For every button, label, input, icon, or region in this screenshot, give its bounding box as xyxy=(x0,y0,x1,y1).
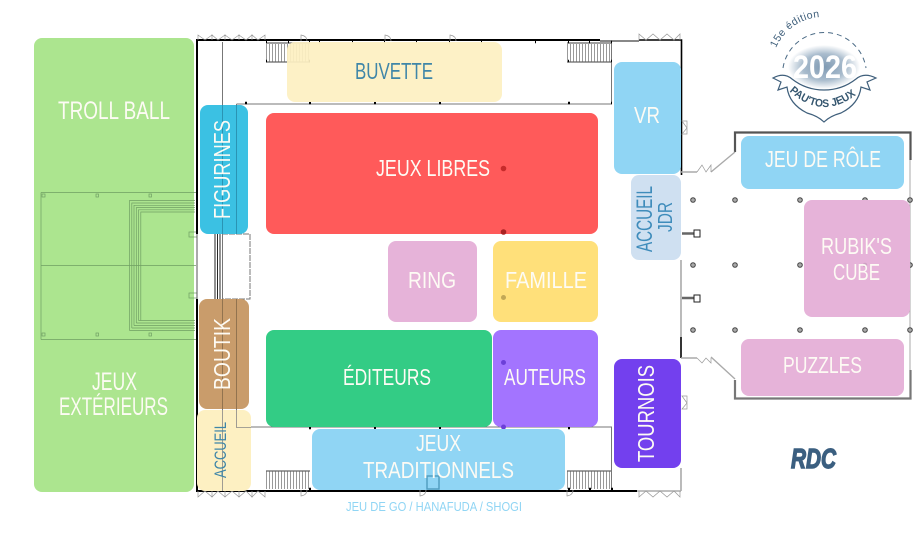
logo edition: 15e édition xyxy=(770,12,819,48)
logo name: PAU'TOS JEUX xyxy=(790,86,856,108)
logo ribbon xyxy=(773,75,876,122)
zone: buvette: BUVETTE xyxy=(355,58,433,84)
logo dashed ring xyxy=(783,32,866,68)
zone: accueil jdr: ACCUEIL xyxy=(632,186,657,252)
annex columns xyxy=(691,198,912,332)
label: rdc level: RDC xyxy=(791,443,837,474)
zone: figurines: FIGURINES xyxy=(209,120,235,219)
zone: jeux traditionnels: JEUX xyxy=(416,430,461,456)
doors xyxy=(198,35,265,40)
logo: pau'tos jeux 2026 xyxy=(770,12,878,123)
outdoor structure plan xyxy=(41,192,197,340)
floor plan: main hall xyxy=(197,34,687,497)
zone: buvette xyxy=(287,42,502,102)
zone: accueil xyxy=(197,410,251,491)
main hall walls xyxy=(197,40,600,234)
zone: auteurs xyxy=(493,330,598,430)
entrance vestibule xyxy=(222,234,250,299)
zone: figurines xyxy=(200,105,248,234)
structural posts xyxy=(245,42,613,489)
label: jeux exterieurs xyxy=(59,368,168,421)
zone: boutik: BOUTIK xyxy=(209,317,235,390)
zone: auteurs: AUTEURS xyxy=(504,364,586,390)
zone: vr xyxy=(614,62,681,174)
zone: rubik's cube: RUBIK'S xyxy=(821,233,892,259)
zone: rubik's cube xyxy=(804,200,910,317)
annex walls xyxy=(735,132,910,160)
zone: rubik's cube: CUBE xyxy=(833,259,880,285)
zone: tournois xyxy=(614,359,681,468)
label: troll ball: TROLL BALL xyxy=(58,97,170,125)
caption: jeu de go: JEU DE GO / HANAFUDA / SHOGI xyxy=(346,500,522,514)
zone: accueil jdr: JDR xyxy=(655,202,677,232)
inner aisles xyxy=(222,42,612,491)
zone: jeux libres xyxy=(266,113,598,235)
zone: jeu de role xyxy=(741,136,904,189)
zone: famille xyxy=(493,241,598,322)
zone: jeux traditionnels: TRADITIONNELS xyxy=(363,457,514,483)
zone: puzzles: PUZZLES xyxy=(783,352,862,378)
zone: ring: RING xyxy=(408,267,456,293)
zone: boutik xyxy=(199,299,249,409)
zone: troll ball and outdoor games xyxy=(34,38,197,492)
zone: vr: VR xyxy=(634,102,660,128)
zone: jeux libres: JEUX LIBRES xyxy=(376,155,490,181)
zone: editeurs xyxy=(266,330,492,427)
zone: accueil jdr xyxy=(631,175,681,260)
label: jeux exterieurs: JEUX xyxy=(92,368,137,396)
zone: editeurs: ÉDITEURS xyxy=(343,364,431,390)
zone: puzzles xyxy=(741,339,904,396)
logo halo xyxy=(788,45,860,89)
floor plan: right annex xyxy=(681,132,912,398)
annex stubs xyxy=(682,234,694,298)
zone: jeux traditionnels xyxy=(312,429,565,490)
zone: jeu de role: JEU DE RÔLE xyxy=(765,145,881,172)
zone: ring xyxy=(388,241,477,322)
zone: accueil: ACCUEIL xyxy=(211,422,230,478)
logo year: 2026 xyxy=(793,49,857,85)
staircases xyxy=(266,53,611,480)
zone: tournois: TOURNOIS xyxy=(633,365,659,462)
zone: famille: FAMILLE xyxy=(505,267,587,293)
label: jeux exterieurs: EXTÉRIEURS xyxy=(59,392,168,421)
